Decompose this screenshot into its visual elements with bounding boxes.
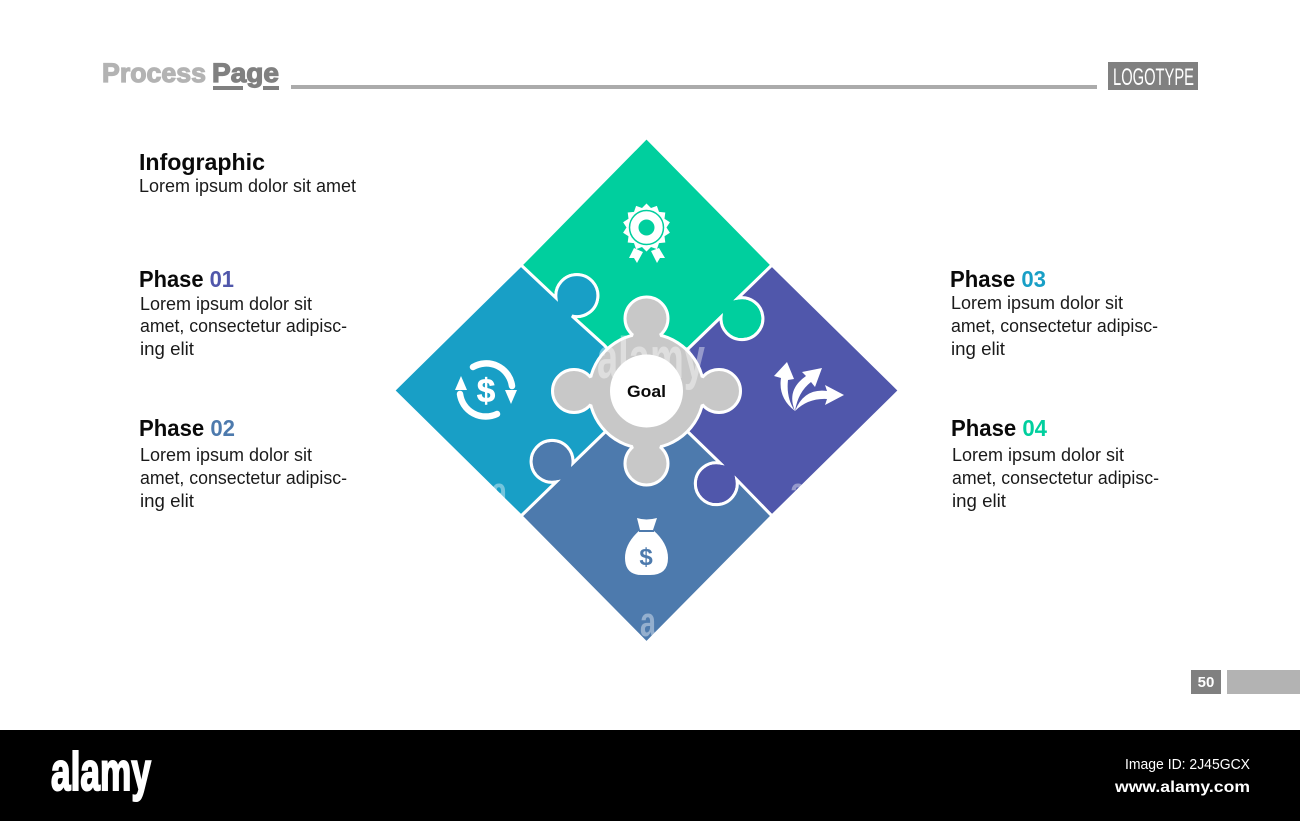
icon: diverging arrows xyxy=(774,362,844,411)
puzzle piece: steel blue bottom xyxy=(521,391,772,643)
intro text block: Lorem ipsum dolor sit amet xyxy=(139,176,356,196)
icon: rosette xyxy=(623,204,670,263)
icon: dollar cycle: $ xyxy=(477,372,495,409)
central goal hub: Goal xyxy=(627,382,666,401)
icon: dollar cycle xyxy=(455,363,517,417)
page number badge: 50 xyxy=(1198,674,1214,691)
phase 03 text: amet, consectetur adipisc- xyxy=(951,316,1158,336)
phase 03 text xyxy=(950,266,1158,359)
logotype badge: LOGOTYPE xyxy=(1113,64,1194,91)
intro text block: Infographic xyxy=(139,149,265,175)
footer logo: alamy xyxy=(51,742,151,802)
phase 04 text: Lorem ipsum dolor sit xyxy=(952,445,1124,465)
stock footer band: Image ID: 2J45GCX xyxy=(1125,756,1250,773)
phase 03 text: Phase 03 xyxy=(950,266,1046,292)
logotype badge xyxy=(1108,62,1198,91)
puzzle piece: green top xyxy=(521,138,772,391)
header title: Process xyxy=(102,58,206,88)
puzzle diamond xyxy=(394,138,900,645)
phase 01 text: Lorem ipsum dolor sit xyxy=(140,294,312,314)
watermark fragments: a xyxy=(790,468,806,515)
phase 04 text xyxy=(951,415,1159,511)
header title xyxy=(102,58,279,90)
central goal hub xyxy=(554,298,739,484)
puzzle piece: teal left xyxy=(394,265,646,516)
phase 04 text: amet, consectetur adipisc- xyxy=(952,468,1159,488)
phase 03 text: Lorem ipsum dolor sit xyxy=(951,293,1123,313)
page number badge xyxy=(1191,670,1221,694)
header rule xyxy=(291,85,1097,89)
phase 04 text: Phase 04 xyxy=(951,415,1047,441)
phase 04 text: ing elit xyxy=(952,491,1006,511)
phase 03 text: ing elit xyxy=(951,339,1005,359)
phase 01 text: ing elit xyxy=(140,339,194,359)
phase 02 text xyxy=(139,415,347,511)
icon: money bag: $ xyxy=(639,544,653,571)
phase 01 text: amet, consectetur adipisc- xyxy=(140,316,347,336)
phase 02 text: ing elit xyxy=(140,491,194,511)
page number bar xyxy=(1227,670,1300,694)
phase 02 text: Lorem ipsum dolor sit xyxy=(140,445,312,465)
phase 01 text xyxy=(139,266,347,359)
watermark fragments xyxy=(491,326,806,645)
stock footer band xyxy=(0,730,1300,821)
header title: Page xyxy=(212,58,279,88)
intro text block xyxy=(139,149,356,196)
phase 01 text: Phase 01 xyxy=(139,266,234,292)
puzzle piece: purple right xyxy=(646,265,900,516)
icon: money bag xyxy=(625,518,668,575)
watermark fragments: alamy xyxy=(597,326,705,391)
phase 02 text: Phase 02 xyxy=(139,415,235,441)
watermark fragments: a xyxy=(640,598,656,645)
stock footer band: www.alamy.com xyxy=(1114,779,1250,796)
phase 02 text: amet, consectetur adipisc- xyxy=(140,468,347,488)
watermark fragments: a xyxy=(491,468,507,515)
